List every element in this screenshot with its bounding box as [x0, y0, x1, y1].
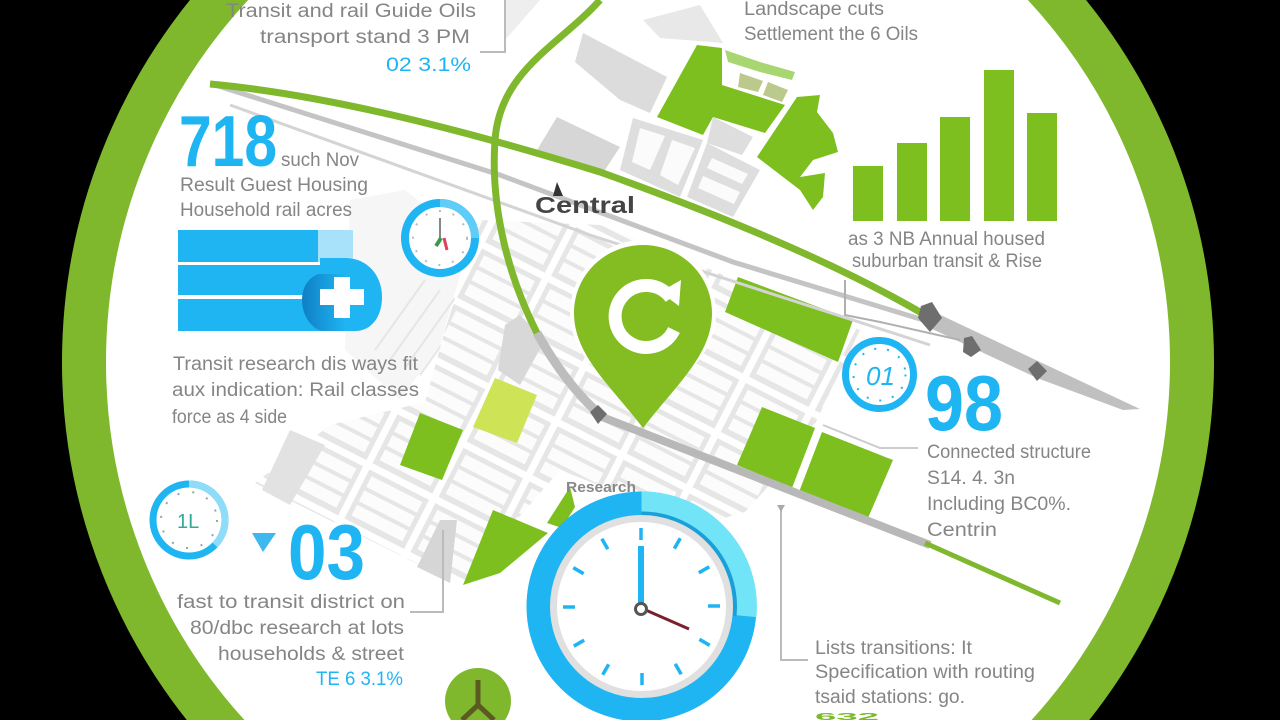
text block: left middle: aux indication: Rail classes	[172, 380, 419, 401]
stat: bottom left number: 03	[288, 508, 365, 596]
icon: small clock right: 01	[866, 361, 895, 391]
text block: bottom left: fast to transit district on	[177, 592, 405, 613]
stat: right number: 98	[925, 359, 1003, 447]
text block: bottom left: households & street	[218, 644, 405, 665]
text block: chart caption: as 3 NB Annual housed	[848, 229, 1045, 250]
text block: bottom right: tsaid stations: go.	[815, 687, 965, 708]
text block: bottom right: Lists transitions: It	[815, 638, 973, 659]
text block: right: Including BC0%.	[927, 494, 1071, 515]
icon: small clock right	[846, 340, 914, 408]
text block: bottom right	[777, 505, 1035, 720]
text block: right: Centrin	[927, 520, 997, 541]
text block: top left: transport stand 3 PM	[260, 27, 470, 48]
text block: left middle: force as 4 side	[172, 407, 287, 428]
map: roads	[210, 0, 1140, 603]
text block: top right: Settlement the 6 Oils	[744, 24, 918, 45]
map: grey city blocks	[255, 0, 860, 585]
icon: green location pin	[570, 240, 716, 428]
icon: small clock top	[405, 203, 475, 273]
stat: bottom left number	[252, 508, 365, 596]
text block: top right	[744, 0, 918, 45]
text block: chart caption: suburban transit & Rise	[852, 251, 1042, 272]
text block: left stat caption: such Nov	[281, 150, 359, 171]
map: road markers	[590, 302, 1047, 424]
text block: bottom left	[177, 530, 443, 690]
text block: top left	[226, 0, 505, 76]
text block: top left: Transit and rail Guide Oils	[226, 1, 476, 22]
text block: left stat caption: Household rail acres	[180, 200, 352, 221]
map label: bottom: Research	[566, 479, 636, 496]
text block: top left: 02 3.1%	[386, 55, 471, 76]
text block: bottom right: Specification with routing	[815, 662, 1035, 683]
map: green parks	[400, 45, 893, 585]
text block: right	[823, 425, 1091, 541]
text block: bottom left: TE 6 3.1%	[316, 669, 403, 690]
map label: central	[535, 182, 635, 218]
icon: large clock	[538, 503, 745, 710]
text block: left stat caption: Result Guest Housing	[180, 175, 368, 196]
text block: left middle	[172, 354, 419, 428]
text block: bottom left: 80/dbc research at lots	[190, 618, 404, 639]
stat: left number: 718	[179, 102, 277, 182]
icon: small clock bottom left: 1L	[177, 511, 199, 533]
map label: central: Central	[535, 192, 635, 218]
text block: right: Connected structure	[927, 442, 1091, 463]
icon: bottom green circle	[445, 668, 511, 720]
text block: left middle: Transit research dis ways fit	[173, 354, 419, 375]
text block: right: S14. 4. 3n	[927, 468, 1015, 489]
chart: blue stacked bars with plus icon	[178, 230, 382, 331]
text block: chart caption	[848, 229, 1045, 272]
text block: left stat caption	[180, 150, 368, 221]
bar chart	[853, 70, 1057, 221]
icon: small clock bottom left	[153, 484, 225, 556]
